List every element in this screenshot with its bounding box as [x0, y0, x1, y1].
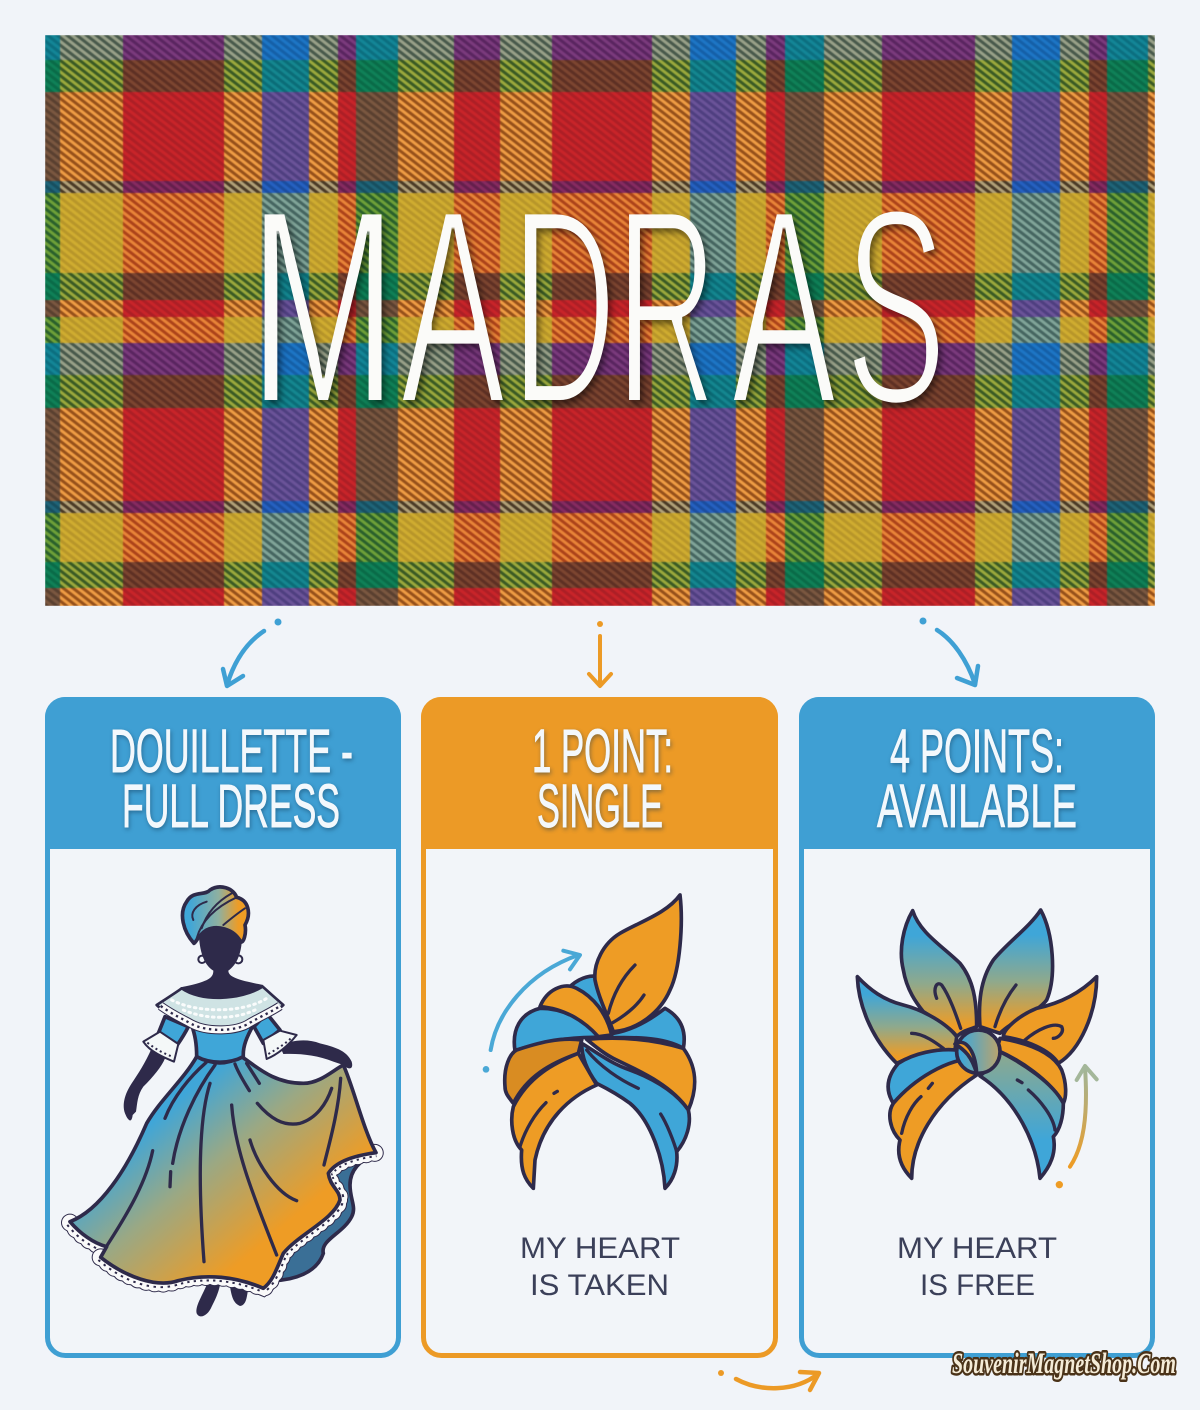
illustration: four-point head wrap	[857, 910, 1097, 1188]
arrow: fabric to dress	[223, 618, 282, 686]
panel heading: AVAILABLE	[877, 772, 1077, 840]
panel heading: DOUILLETTE -	[110, 717, 353, 785]
feet	[196, 1285, 248, 1316]
hem lace	[70, 1153, 376, 1288]
lift arrow	[1070, 1066, 1097, 1167]
illustration: one-point head wrap	[483, 895, 695, 1188]
upright leaf	[595, 895, 681, 1032]
title: MADRAS: M	[249, 150, 397, 463]
wrap folds	[540, 986, 612, 1037]
turn arrow	[483, 951, 580, 1073]
side leaves	[857, 977, 957, 1063]
arrow: fabric to single	[589, 621, 611, 686]
panel header band	[421, 697, 778, 849]
right arm	[280, 1040, 352, 1068]
panel header band	[45, 697, 401, 849]
sleeve cuffs	[143, 1031, 297, 1062]
skirt	[70, 1057, 376, 1288]
panel frame	[48, 700, 398, 1356]
neck and chest	[181, 920, 263, 998]
left arm	[124, 1048, 165, 1120]
panel heading: 4 POINTS:	[890, 717, 1064, 785]
center knot	[957, 1030, 1000, 1073]
panel heading: 1 POINT:	[532, 717, 673, 785]
panel heading	[532, 717, 673, 840]
caption: my heart is free: MY HEART	[897, 1232, 1057, 1265]
panel: four points available	[799, 697, 1155, 1356]
title: MADRAS: R	[617, 150, 717, 463]
madras plaid fabric banner	[45, 35, 1155, 606]
panel heading	[110, 717, 353, 840]
title: MADRAS: A	[731, 151, 837, 464]
skirt folds	[107, 1063, 341, 1262]
caption: my heart is taken: IS TAKEN	[530, 1269, 669, 1302]
title: MADRAS: D	[512, 152, 616, 464]
wrap bands	[888, 1050, 973, 1103]
sleeves	[158, 1013, 280, 1048]
head wrap folds	[192, 893, 245, 938]
caption: my heart is free	[897, 1232, 1057, 1302]
panel frame	[424, 700, 776, 1356]
title: MADRAS	[249, 150, 946, 464]
head wrap	[182, 887, 248, 943]
earrings	[198, 955, 242, 963]
arrow origin dot	[1056, 1181, 1063, 1188]
wrap back	[572, 976, 613, 1038]
collar lace trim	[161, 1006, 280, 1030]
panel header band	[799, 697, 1155, 849]
panel: one point single	[421, 697, 778, 1356]
title: MADRAS: A	[400, 151, 506, 464]
panel: douillette full dress	[45, 697, 401, 1356]
underskirt	[273, 1153, 376, 1281]
caption: my heart is free: IS FREE	[920, 1269, 1035, 1302]
bodice	[192, 1024, 254, 1062]
upper leaves	[901, 911, 977, 1037]
crease lines	[520, 965, 677, 1152]
crease lines	[902, 984, 1062, 1133]
arrow: bottom connector	[718, 1370, 819, 1390]
panel frame	[802, 700, 1152, 1356]
illustration: woman in douillette dress	[70, 887, 376, 1316]
arrow: fabric to available	[920, 618, 978, 685]
collar lace pattern	[172, 998, 267, 1017]
caption: my heart is taken	[520, 1232, 680, 1302]
caption: my heart is taken: MY HEART	[520, 1232, 680, 1265]
panel heading: FULL DRESS	[122, 772, 340, 840]
collar lace	[157, 987, 283, 1031]
panel heading	[877, 717, 1077, 840]
title: MADRAS: S	[845, 150, 946, 463]
panel heading: SINGLE	[537, 772, 663, 840]
